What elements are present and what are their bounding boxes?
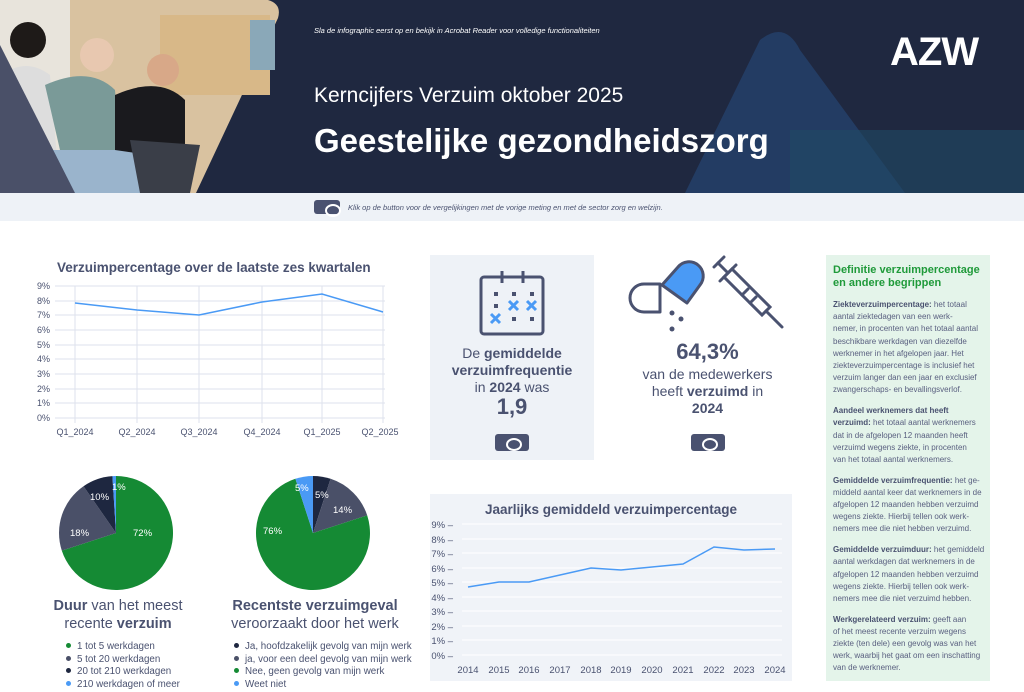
panel: share absent: 64,3% — [676, 339, 739, 364]
chart: quarterly: 8% — [37, 296, 50, 306]
panel: definitions: van het totaal aantal werknemers. — [833, 455, 953, 464]
pie: duration: 1 tot 5 werkdagen — [77, 641, 155, 652]
pie: duration: 72% — [133, 528, 153, 539]
pie: duration: 5 tot 20 werkdagen — [77, 654, 160, 664]
panel: definitions: werk, waarbij het gaat om een inschatting — [833, 651, 980, 660]
panel: frequency: De gemiddelde verzuimfrequentie — [452, 345, 572, 378]
panel: definitions: Werkgerelateerd verzuim: geeft aan — [833, 615, 966, 624]
decorative A shape — [685, 32, 905, 193]
pie: work-related: ja, voor een deel gevolg van mijn werk — [245, 654, 412, 664]
panel: definitions: werknemer in het afgelopen jaar. Het — [833, 349, 964, 358]
chart: quarterly: 0% — [37, 413, 50, 423]
pie: work-related: Ja, hoofdzakelijk gevolg van mijn werk — [245, 641, 412, 652]
panel: definitions: verzuim langer dan een jaar en exclusief — [833, 373, 977, 382]
panel: share absent: van de medewerkers — [643, 366, 772, 382]
panel: definitions: aantal ziektedagen van een werk- — [833, 312, 953, 321]
chart: quarterly: 1% — [37, 398, 50, 408]
chart: quarterly: Q3_2024 — [180, 427, 218, 437]
chart: quarterly: 4% — [37, 354, 50, 364]
panel: frequency: 1,9 — [497, 394, 527, 419]
panel: definitions: middeld aantal keer dat werknemers in de — [833, 488, 982, 497]
chart: yearly: 2019 — [610, 665, 632, 676]
chart: yearly: 1% – — [431, 636, 454, 647]
chart: yearly: 7% – — [431, 549, 454, 560]
panel: definitions: ziekteverzuimpercentage is inclusief het — [833, 361, 974, 370]
panel: definitions: en andere begrippen — [833, 277, 941, 289]
panel: definitions — [826, 255, 990, 681]
panel: definitions: verzuimd wegens ziekte, in procenten — [833, 443, 967, 452]
chart: quarterly: 6% — [37, 325, 50, 335]
panel: definitions: nemer, in procenten van het totaal aantal — [833, 324, 978, 333]
panel: definitions: dat in de afgelopen 12 maanden heeft — [833, 431, 968, 440]
panel: definitions: nemers mee die niet hebben verzuimd. — [833, 524, 971, 533]
panel: share absent: heeft verzuimd in — [652, 383, 763, 399]
chart: yearly: 2022 — [703, 665, 725, 676]
panel: definitions: afgelopen 12 maanden hebben verzuimd — [833, 570, 978, 579]
chart: quarterly: Q1_2024 — [56, 427, 94, 437]
subtitle: Kerncijfers Verzuim oktober 2025 — [314, 84, 623, 107]
chart: yearly: 2% – — [431, 622, 454, 633]
pie: duration: 20 tot 210 werkdagen — [77, 666, 171, 677]
chart: yearly: 9% – — [431, 520, 454, 531]
icon: pill and syringe — [628, 255, 784, 332]
chart: quarterly: Verzuimpercentage over de laatste zes kwartalen — [57, 260, 371, 275]
chart: yearly: Jaarlijks gemiddeld verzuimpercentage — [485, 502, 737, 517]
panel: frequency: in 2024 was — [475, 379, 549, 395]
chart: quarterly: Q2_2024 — [118, 427, 156, 437]
info bar: Klik op de button voor de vergelijkingen met de vorige meting en met de sector zorg en welzijn. — [348, 203, 663, 212]
pie: duration: 10% — [90, 492, 110, 503]
chart: quarterly: 3% — [37, 369, 50, 379]
pie: work-related: Nee, geen gevolg van mijn werk — [245, 666, 384, 677]
panel: definitions: aantal werkdagen dat werknemers in de — [833, 557, 975, 566]
chart: yearly: 2020 — [641, 665, 663, 676]
title: Geestelijke gezondheidszorg — [314, 122, 769, 159]
chart: quarterly: Q2_2025 — [361, 427, 399, 437]
panel: definitions: zwangerschaps- en bevallingsverlof. — [833, 385, 962, 394]
panel: definitions: Gemiddelde verzuimfrequentie: het ge- — [833, 476, 980, 485]
logo: AZW — [890, 30, 978, 74]
chart: yearly: 2015 — [488, 665, 510, 676]
panel: definitions: of het meest recente verzuim wegens — [833, 627, 966, 636]
chart: quarterly: 2% — [37, 384, 50, 394]
icon: calendar — [480, 271, 544, 336]
photo — [0, 0, 279, 193]
chart: quarterly: Q4_2024 — [243, 427, 281, 437]
note: Sla de infographic eerst op en bekijk in Acrobat Reader voor volledige functionaliteiten — [314, 26, 600, 35]
info bar — [0, 193, 1024, 221]
pie: work-related: Recentste verzuimgeval — [232, 598, 398, 614]
pie: work-related — [231, 476, 412, 690]
chart: yearly: 3% – — [431, 607, 454, 618]
pie: work-related: 14% — [333, 505, 353, 516]
panel: definitions: verzuimd: het totaal aantal werknemers — [833, 418, 976, 427]
panel: definitions: afgelopen 12 maanden hebben verzuimd — [833, 500, 978, 509]
panel: share absent: 2024 — [692, 400, 723, 416]
panel: share absent — [628, 255, 784, 451]
chart: yearly: 2016 — [518, 665, 540, 676]
pie: work-related: Weet niet — [245, 678, 286, 690]
chart: yearly: 2017 — [549, 665, 571, 676]
panel: definitions: Gemiddelde verzuimduur: het gemiddeld — [833, 545, 984, 554]
chart: yearly: 5% – — [431, 578, 454, 589]
chart: quarterly — [37, 260, 399, 438]
pie: duration: 210 werkdagen of meer — [77, 678, 180, 690]
pie: work-related: veroorzaakt door het werk — [231, 616, 399, 632]
panel: definitions: ziekte (ten dele) een gevolg was van het — [833, 639, 976, 648]
chart: yearly: 6% – — [431, 564, 454, 575]
pie: work-related: 5% — [315, 490, 329, 501]
panel: definitions: wegens ziekte. Hierbij tellen ook werk- — [833, 582, 969, 591]
panel: definitions: nemers mee die niet verzuimd hebben. — [833, 594, 971, 603]
panel: definitions: van de werknemer. — [833, 663, 901, 672]
panel: definitions: Definitie verzuimpercentage — [833, 264, 980, 276]
chart: quarterly: 7% — [37, 310, 50, 320]
pie: work-related: 76% — [263, 526, 283, 537]
chart: yearly — [430, 494, 792, 681]
chart: quarterly: 9% — [37, 281, 50, 291]
chart: yearly: 4% – — [431, 593, 454, 604]
panel: definitions: Ziekteverzuimpercentage: het totaal — [833, 300, 967, 309]
pie: duration: 18% — [70, 528, 90, 539]
chart: yearly: 2023 — [733, 665, 755, 676]
chart: quarterly: 5% — [37, 340, 50, 350]
pie: duration — [54, 476, 182, 690]
pie: work-related: 5% — [295, 483, 309, 494]
panel: definitions: beschikbare werkdagen van diezelfde — [833, 337, 967, 346]
panel: definitions: Aandeel werknemers dat heeft — [833, 406, 949, 415]
header banner — [0, 0, 1024, 193]
chart: quarterly: Q1_2025 — [303, 427, 341, 437]
chart: yearly: 2018 — [580, 665, 602, 676]
pie: duration: 1% — [112, 482, 126, 493]
pie: duration: Duur van het meest — [54, 598, 182, 614]
chart: yearly: 8% – — [431, 535, 454, 546]
chart: yearly: 2024 — [764, 665, 786, 676]
panel: definitions: wegens ziekte. Hierbij tellen ook werk- — [833, 512, 969, 521]
chart: yearly: 2021 — [672, 665, 694, 676]
chart: yearly: 2014 — [457, 665, 479, 676]
pie: duration: recente verzuim — [64, 616, 172, 632]
chart: yearly: 0% – — [431, 651, 454, 662]
panel: frequency — [430, 255, 594, 460]
